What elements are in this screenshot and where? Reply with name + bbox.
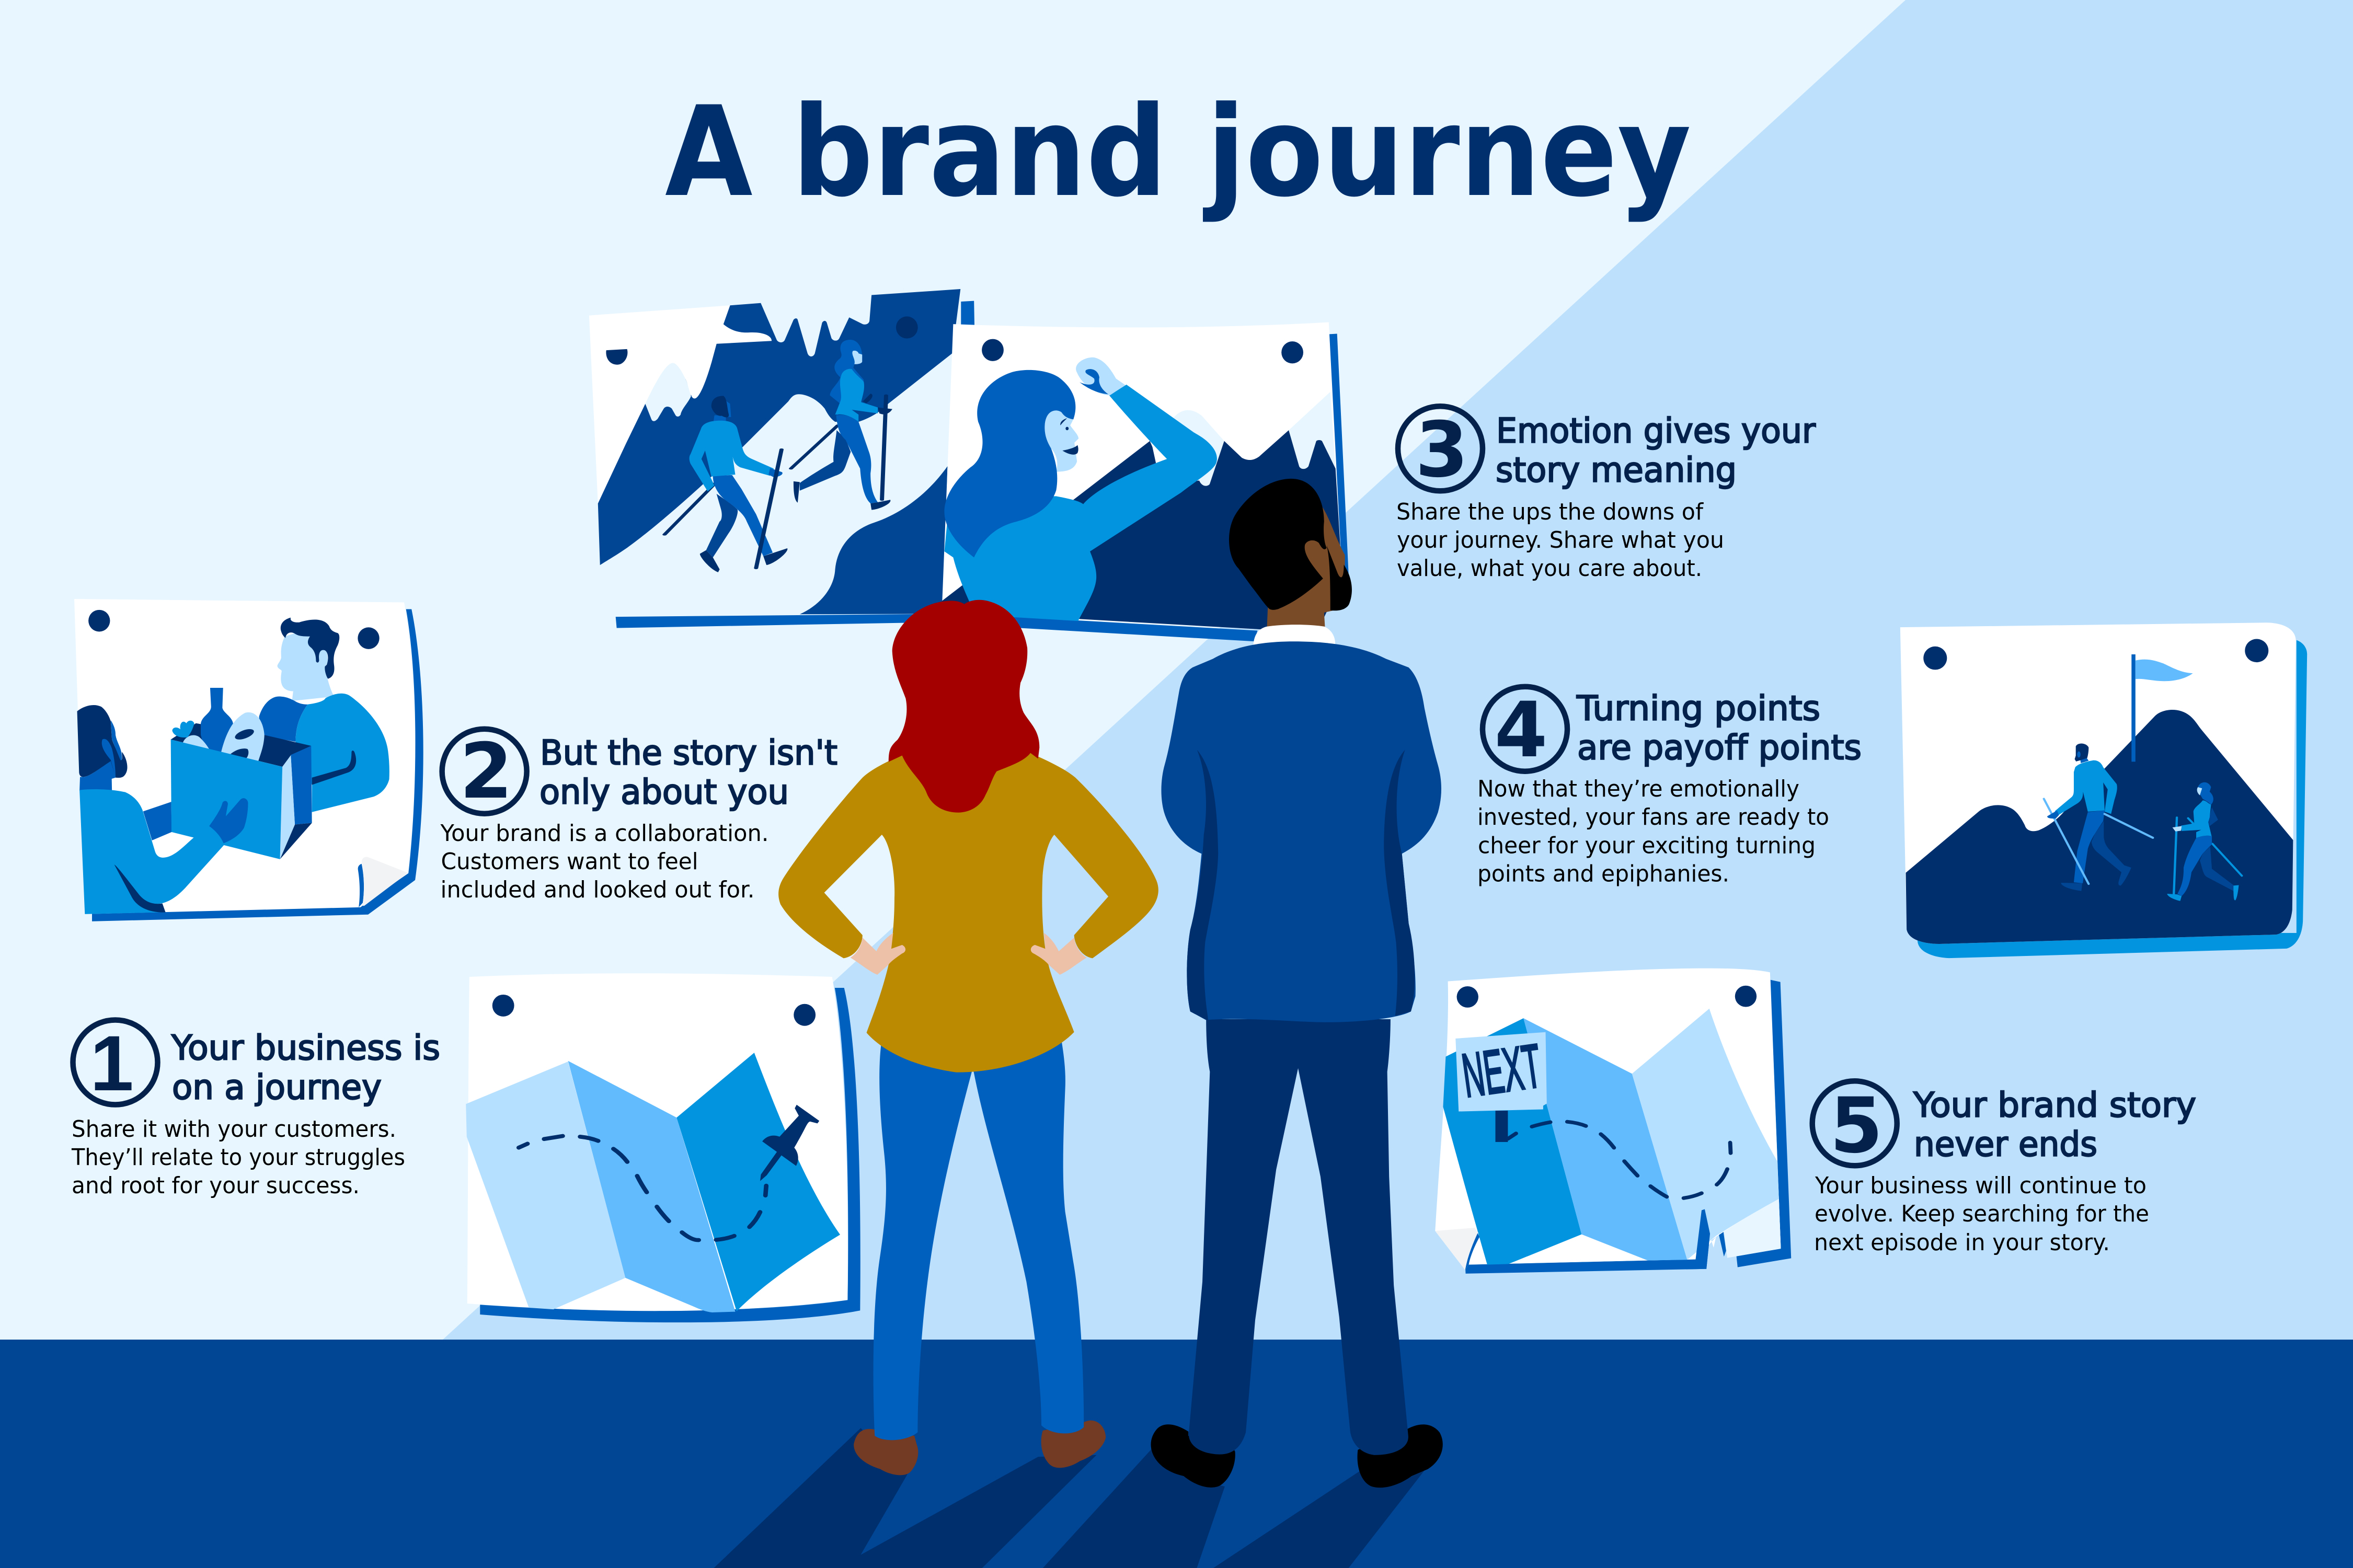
woman figure: [778, 600, 1158, 1475]
number badge 5: 5: [1830, 1081, 1883, 1170]
poster pins: [492, 995, 816, 1026]
heading 2: But the story isn't: [540, 734, 837, 773]
icon: summit flag: [2131, 654, 2193, 762]
woman jeans and shoes: [854, 1040, 1106, 1475]
number badge 1: [73, 1019, 158, 1107]
heading 5: Your brand story: [1913, 1086, 2196, 1125]
man jacket and collar: [1161, 625, 1441, 1022]
poster pins: [88, 610, 380, 649]
poster pins: [896, 316, 918, 339]
body 1: Share it with your customers.: [72, 1116, 396, 1143]
step 5: [1812, 1081, 2196, 1256]
step 3: [1396, 406, 1816, 582]
poster pins: [982, 339, 1004, 361]
heading 4: Turning points: [1576, 689, 1820, 729]
floor: [0, 1340, 2353, 1568]
number badge 1: 1: [90, 1019, 134, 1107]
number badge 4: 4: [1495, 686, 1547, 775]
body 5: next episode in your story.: [1814, 1229, 2110, 1256]
woman with raised arm: [944, 358, 1217, 621]
body 3: value, what you care about.: [1397, 555, 1702, 582]
step 4: [1477, 686, 1862, 887]
signpost: [1455, 1032, 1547, 1142]
woman handing box: [77, 705, 248, 914]
man legs and shoes: [1151, 1019, 1443, 1488]
poster: next episode map: [1435, 969, 1791, 1274]
hiker: woman: [791, 340, 892, 510]
heading 5: never ends: [1914, 1125, 2097, 1165]
poster pins: [1923, 639, 2268, 670]
number badge 2: [442, 727, 527, 816]
man receiving box: [259, 618, 389, 812]
poster: hikers reaching the flag: [1900, 622, 2307, 958]
hiker: woman with poles: [2167, 782, 2242, 901]
body 2: included and looked out for.: [440, 877, 755, 903]
body 3: your journey. Share what you: [1397, 527, 1724, 554]
heading 3: Emotion gives your: [1496, 412, 1816, 451]
step 1: [71, 1019, 440, 1199]
body 5: evolve. Keep searching for the: [1815, 1201, 2149, 1227]
poster: customers collaboration: [74, 599, 423, 921]
man figure, behind the woman: [714, 479, 1443, 1568]
body 4: Now that they’re emotionally: [1477, 776, 1799, 802]
body 5: Your business will continue to: [1815, 1172, 2147, 1199]
heading 1: Your business is: [171, 1029, 440, 1068]
body 3: Share the ups the downs of: [1396, 499, 1704, 525]
number badge 5: [1812, 1081, 1897, 1170]
heading 4: are payoff points: [1577, 729, 1862, 768]
poster: business journey map: [466, 973, 860, 1322]
shadows on floor: [714, 1428, 1426, 1568]
poster pins: [1457, 986, 1757, 1008]
heading 3: story meaning: [1496, 451, 1737, 490]
body 1: and root for your success.: [72, 1172, 360, 1199]
number badge 2: 2: [460, 727, 513, 816]
dashed route: [519, 1136, 766, 1240]
body 4: cheer for your exciting turning: [1478, 833, 1816, 859]
hiker: man with poles: [2044, 744, 2153, 891]
heading 1: on a journey: [172, 1068, 382, 1108]
body 4: points and epiphanies.: [1477, 861, 1729, 887]
number badge 3: 3: [1415, 406, 1468, 494]
body 4: invested, your fans are ready to: [1477, 804, 1829, 831]
title: A brand journey: [665, 80, 1691, 225]
number badge 3: [1398, 406, 1483, 494]
body 2: Your brand is a collaboration.: [440, 820, 768, 847]
hiker: man: [664, 396, 787, 572]
poster: hikers in the mountains: [589, 289, 974, 628]
groceries box: [143, 688, 312, 859]
body 2: Customers want to feel: [441, 848, 698, 875]
body 1: They’ll relate to your struggles: [71, 1144, 405, 1171]
man head: [1229, 479, 1352, 629]
woman sweater, hands and hair: [778, 600, 1158, 1073]
dashed route: [1508, 1122, 1731, 1198]
step 2: [440, 727, 837, 903]
sign label: NEXT: NEXT: [1458, 1031, 1545, 1111]
poster: woman in the mountains: [939, 322, 1349, 641]
icon: push pin: [760, 1105, 819, 1181]
number badge 4: [1483, 686, 1567, 775]
heading 2: only about you: [540, 773, 789, 812]
map-style lower hill: [800, 466, 947, 614]
